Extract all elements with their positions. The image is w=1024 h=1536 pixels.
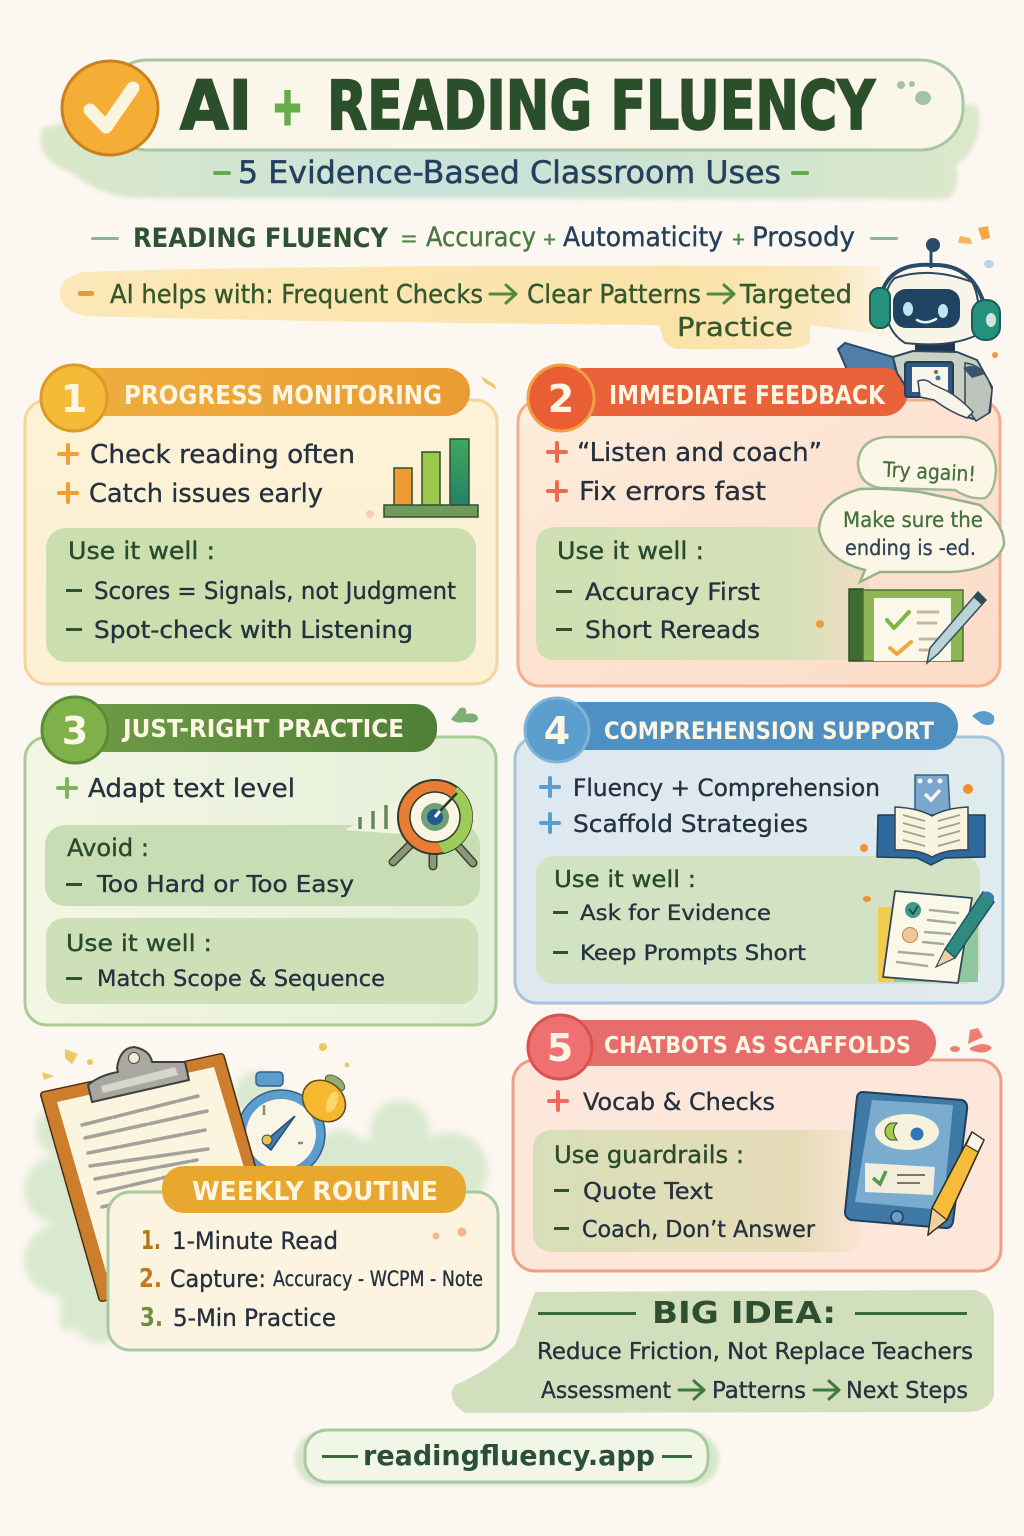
panel: 3 just-right practice: JUST-RIGHT PRACTICE — [121, 714, 404, 743]
bullets: “Listen and coach” — [577, 438, 822, 468]
number badge — [528, 1015, 592, 1079]
icon: clipboard — [44, 1047, 279, 1298]
panel: big idea: Next Steps — [846, 1378, 968, 1404]
bullet: Adapt text level — [88, 774, 295, 804]
use it well box — [536, 527, 900, 660]
title text — [180, 67, 876, 146]
panel: 3 just-right practice — [25, 697, 496, 1025]
avoid box — [45, 825, 480, 906]
definition line: READING FLUENCY — [133, 223, 388, 254]
accent coral splash — [950, 1028, 992, 1053]
panel: big idea: Assessment — [541, 1378, 671, 1404]
guardrails box: Use guardrails : — [554, 1141, 744, 1169]
panel: 4 comprehension support: COMPREHENSION SUPPORT — [604, 717, 935, 745]
robot torso — [893, 351, 992, 420]
title pill — [105, 60, 963, 150]
number badge — [525, 698, 589, 762]
use it well box: Short Rereads — [585, 616, 760, 644]
bullets: Scaffold Strategies — [573, 810, 808, 838]
number badge: 5 — [547, 1026, 573, 1070]
step list: 1-Minute Read — [172, 1227, 338, 1255]
icon: notebook and pencil — [816, 589, 986, 663]
number badge: 3 — [62, 709, 88, 753]
guardrails box: Quote Text — [583, 1179, 713, 1205]
antenna — [930, 250, 932, 268]
panel: 5 chatbots as scaffolds: CHATBOTS AS SCAFFOLDS — [604, 1033, 911, 1059]
confetti near clipboard — [42, 1043, 350, 1080]
speech bubble: make sure: ending is -ed. — [845, 536, 976, 560]
header pill — [556, 1020, 936, 1066]
title text: + — [272, 77, 303, 137]
use it well box: Use it well : — [66, 931, 212, 957]
accent blue splash — [972, 711, 994, 725]
step list: Capture: — [170, 1265, 266, 1293]
panel: 1 progress monitoring: PROGRESS MONITORING — [124, 381, 442, 411]
panel: 5 chatbots as scaffolds — [513, 1015, 1001, 1271]
arrow — [708, 285, 734, 303]
panel: 2 immediate feedback: IMMEDIATE FEEDBACK — [609, 381, 886, 411]
headphone right — [972, 300, 1000, 340]
AI helps banner: Targeted — [739, 280, 852, 310]
confetti near robot — [481, 226, 998, 390]
heading: BIG IDEA: — [652, 1296, 836, 1331]
chest screen — [905, 362, 953, 397]
arrow — [490, 285, 516, 303]
number badge — [528, 365, 594, 431]
green wash — [24, 1071, 488, 1343]
icon: robot laptop — [838, 343, 896, 372]
forearm and hand — [918, 380, 973, 418]
header text: WEEKLY ROUTINE — [192, 1177, 438, 1207]
banner watercolor wash — [41, 90, 979, 199]
definition line: + — [731, 229, 746, 250]
yellow band — [60, 266, 885, 349]
headband — [882, 265, 984, 304]
use it well box: Accuracy First — [585, 578, 760, 606]
bullets: Fix errors fast — [579, 477, 766, 507]
header pill — [560, 368, 908, 416]
bar chart icon — [384, 439, 478, 517]
bullets — [548, 438, 822, 507]
use it well box: Scores = Signals, not Judgment — [94, 577, 456, 605]
panel: big idea — [452, 1290, 994, 1413]
bullets — [59, 440, 355, 509]
speech bubble: make sure — [819, 489, 1004, 582]
number badge — [41, 365, 107, 431]
icon: checklist and pen — [863, 891, 994, 983]
clip — [88, 1047, 189, 1102]
confetti — [432, 1228, 466, 1240]
AI helps banner — [60, 266, 885, 349]
headphone left — [870, 288, 890, 328]
step list: 2. — [139, 1264, 162, 1294]
title banner — [41, 60, 979, 199]
number badge: 4 — [544, 709, 570, 753]
robot mascot — [870, 238, 1000, 421]
head — [885, 273, 979, 344]
avoid box: Too Hard or Too Easy — [96, 872, 354, 898]
subtitle: 5 Evidence-Based Classroom Uses — [238, 155, 781, 191]
website link: readingfluency.app — [363, 1439, 655, 1472]
website link — [295, 1430, 719, 1486]
avoid box: Avoid : — [67, 834, 149, 862]
bullets — [541, 774, 880, 838]
speech bubble: make sure: Make sure the — [843, 508, 983, 532]
use it well box — [46, 918, 478, 1004]
header pill — [556, 702, 958, 750]
use it well box: Use it well : — [557, 537, 704, 565]
AI helps banner: Clear Patterns — [527, 280, 701, 310]
number badge: 2 — [548, 377, 574, 421]
use it well box: Ask for Evidence — [580, 901, 771, 925]
heading — [538, 1296, 967, 1331]
bullets: Check reading often — [90, 440, 355, 470]
use it well box — [46, 528, 476, 662]
step list: 3. — [140, 1303, 163, 1333]
title text: AI — [180, 67, 252, 146]
neck — [915, 340, 955, 354]
bullet: Vocab & Checks — [583, 1088, 775, 1116]
panel: 4 comprehension support — [515, 698, 1003, 1003]
guardrails box — [533, 1130, 863, 1252]
decorative dots — [897, 81, 931, 105]
definition line: Automaticity — [563, 222, 723, 253]
speech bubble: try again: Try again! — [882, 458, 977, 486]
icon: open book — [860, 775, 985, 865]
use it well box: Use it well : — [554, 867, 696, 893]
title text: READING FLUENCY — [327, 67, 876, 146]
panel: big idea: Patterns — [712, 1378, 806, 1404]
face screen — [893, 289, 960, 328]
routine card — [108, 1192, 498, 1350]
panel: 2 immediate feedback — [518, 365, 1004, 686]
speech bubble: try again — [858, 437, 996, 498]
arrow — [814, 1381, 839, 1399]
arrow — [679, 1381, 704, 1399]
definition line: Prosody — [752, 222, 855, 253]
step list: 5-Min Practice — [173, 1304, 336, 1332]
icon: orange check badge — [62, 61, 158, 155]
definition line: + — [542, 229, 557, 250]
header pill — [70, 368, 470, 416]
icon: stopwatch — [237, 1072, 354, 1178]
use it well box: Use it well : — [68, 537, 215, 565]
bullets: Fluency + Comprehension — [573, 774, 880, 802]
use it well box: Spot-check with Listening — [94, 616, 413, 644]
panel: weekly routine — [24, 1047, 498, 1350]
number badge — [42, 697, 108, 763]
header pill — [162, 1166, 466, 1213]
step list — [139, 1226, 483, 1333]
number badge: 1 — [61, 377, 87, 421]
icon: target — [345, 780, 473, 866]
panel: big idea: Reduce Friction, Not Replace Teachers — [537, 1339, 973, 1365]
panel: 1 progress monitoring — [25, 365, 497, 684]
use it well box — [536, 856, 980, 984]
text lines on clipboard — [82, 1096, 208, 1207]
step list: 1. — [141, 1226, 161, 1256]
AI helps banner: Practice — [677, 313, 793, 343]
guardrails box: Coach, Don’t Answer — [582, 1217, 816, 1243]
definition line — [91, 222, 898, 254]
AI helps banner: AI helps with: Frequent Checks — [110, 280, 483, 310]
use it well box: Keep Prompts Short — [580, 941, 806, 965]
definition line: = — [400, 224, 418, 254]
bullets: Catch issues early — [89, 479, 323, 509]
use it well box: Match Scope & Sequence — [97, 967, 385, 992]
icon: tablet and pencil — [845, 1092, 984, 1235]
step list: Accuracy - WCPM - Note — [273, 1267, 483, 1291]
header pill — [70, 704, 437, 752]
definition line: Accuracy — [426, 222, 536, 253]
leaf accent — [451, 708, 478, 723]
upper arm — [965, 363, 992, 421]
